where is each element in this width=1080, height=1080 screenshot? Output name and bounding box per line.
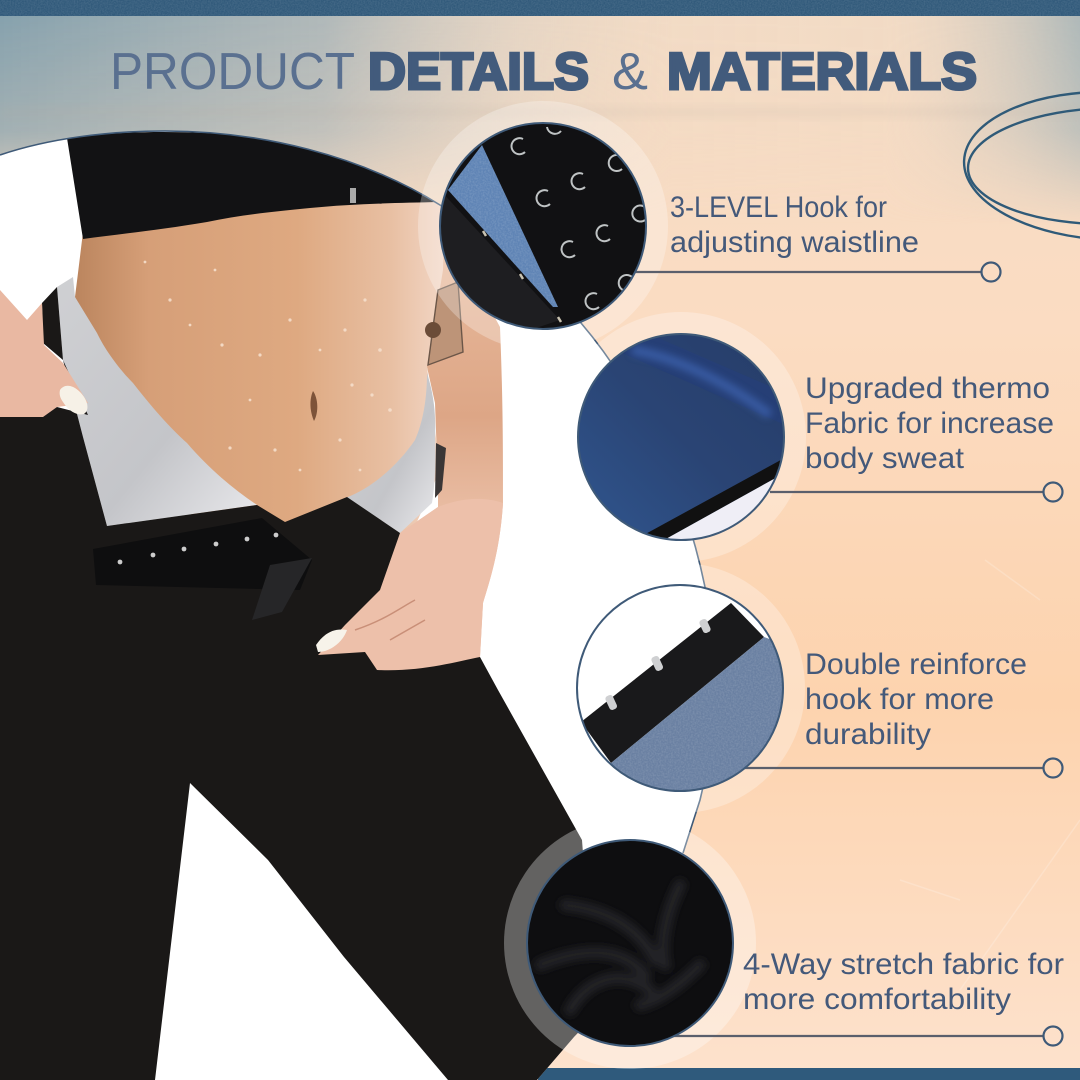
- right arm: [417, 256, 503, 656]
- halo: [504, 817, 756, 1069]
- waistband shadow by wrist: [435, 443, 446, 498]
- connector line: [665, 1035, 1044, 1037]
- sweat droplets: [144, 261, 392, 471]
- panel: thermo fabric: [556, 312, 1062, 562]
- detail photo: [583, 589, 782, 790]
- caption: hook for more: [805, 683, 994, 716]
- detail photo: [525, 838, 735, 1048]
- panel: stretch fabric: [504, 817, 1064, 1069]
- torso skin: [75, 200, 445, 560]
- silver lining right: [345, 373, 435, 533]
- caption: body sweat: [805, 442, 965, 475]
- detail photo: [579, 335, 783, 539]
- end marker: [1044, 482, 1062, 502]
- title: MATERIALS: [667, 43, 977, 101]
- title: &: [612, 43, 648, 101]
- hook tape: [93, 518, 312, 620]
- caption: Double reinforce: [805, 648, 1027, 681]
- caption: [743, 948, 1064, 1016]
- end marker: [1044, 758, 1062, 778]
- tattoo: [425, 282, 463, 365]
- title: PRODUCT: [110, 43, 355, 101]
- detail photo: [441, 124, 645, 328]
- caption: 4-Way stretch fabric for: [743, 948, 1064, 981]
- title: [110, 43, 977, 101]
- left hand: [0, 290, 88, 417]
- panel: reinforced hook: [555, 563, 1062, 813]
- connector line: [770, 491, 1044, 493]
- panel: 3-level hook: [418, 101, 1000, 351]
- crop top: [67, 132, 450, 239]
- caption: durability: [805, 718, 931, 751]
- caption: [805, 372, 1054, 475]
- decorative ellipses top right: [962, 87, 1080, 245]
- caption: more comfortability: [743, 983, 1011, 1016]
- white photo backdrop: [0, 120, 720, 1080]
- caption: Upgraded thermo: [805, 372, 1050, 405]
- caption: [805, 648, 1027, 751]
- belly button: [310, 391, 317, 421]
- title: DETAILS: [368, 43, 589, 101]
- leggings: [0, 287, 600, 1080]
- model photo panel: [0, 120, 720, 1080]
- caption: Fabric for increase: [805, 407, 1054, 440]
- connector line: [745, 767, 1044, 769]
- caption: [670, 191, 919, 259]
- right hand: [316, 499, 503, 670]
- connector line: [635, 271, 982, 273]
- halo: [556, 312, 806, 562]
- top blue band: [0, 0, 1080, 16]
- caption: 3-LEVEL Hook for: [670, 191, 887, 224]
- end marker: [982, 262, 1000, 282]
- panel outline arc: [0, 131, 712, 853]
- end marker: [1044, 1026, 1062, 1046]
- halo: [555, 563, 805, 813]
- halo: [418, 101, 668, 351]
- caption: adjusting waistline: [670, 226, 919, 259]
- bottom blue band: [538, 1068, 1080, 1080]
- silver lining left: [57, 277, 257, 526]
